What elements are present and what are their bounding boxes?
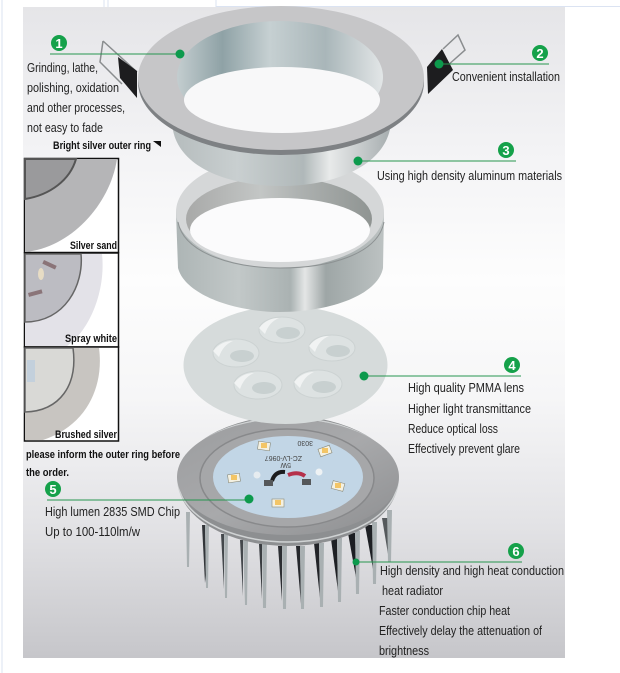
product: PMMA lens (184, 306, 388, 424)
callout 6: High density and high heat conduction (380, 563, 564, 578)
callout 4: Higher light transmittance (408, 401, 531, 416)
outer ring label: Bright silver outer ring (53, 140, 151, 152)
callout 3: Using high density aluminum materials (377, 168, 562, 183)
callout 1: Grinding, lathe, (27, 60, 98, 75)
LED circuit board (213, 436, 363, 518)
right clip (443, 35, 465, 66)
label: Silver sand (70, 240, 117, 252)
callout 5: Up to 100-110lm/w (45, 524, 141, 539)
inset: brushed silver (24, 347, 118, 441)
callout 2: Convenient installation (452, 69, 560, 84)
product: threaded ring (176, 156, 384, 312)
product: heat sink with LED board (177, 416, 399, 609)
callout 4: 4 (508, 358, 516, 373)
callout 1: and other processes, (27, 100, 125, 115)
callout 2: 2 (536, 46, 544, 61)
callout 3 (354, 142, 562, 183)
callout 6: heat radiator (382, 583, 444, 598)
inset: silver sand (24, 158, 118, 252)
callout 6: brightness (379, 643, 429, 658)
callout 6 (352, 543, 564, 658)
left clip (100, 41, 137, 84)
callout 6: Faster conduction chip heat (379, 603, 510, 618)
callout 3: 3 (502, 143, 510, 158)
rim (178, 416, 398, 546)
callout 6: 6 (512, 544, 520, 559)
callout 1: 1 (55, 36, 63, 51)
callout 4: Effectively prevent glare (408, 441, 520, 456)
product: outer ring housing (100, 6, 465, 186)
callout 2 (434, 45, 560, 84)
label: Brushed silver (55, 429, 118, 441)
label: Spray white (65, 333, 117, 345)
order note: please inform the outer ring before (26, 449, 180, 461)
fins (186, 510, 392, 609)
callout 1: not easy to fade (27, 120, 103, 135)
callout 4: High quality PMMA lens (408, 380, 524, 395)
callout 1: polishing, oxidation (27, 80, 119, 95)
product: heat sink with LED board: 5W (280, 461, 291, 468)
product: heat sink with LED board: 3030 (297, 439, 313, 446)
callout 5: High lumen 2835 SMD Chip (45, 504, 180, 519)
inset: spray white (24, 253, 118, 347)
order note (26, 449, 180, 479)
callout 1 (27, 35, 184, 135)
callout 4: Reduce optical loss (408, 421, 498, 436)
callout 5: 5 (49, 482, 57, 497)
callout 6: Effectively delay the attenuation of (379, 623, 542, 638)
order note: the order. (26, 467, 69, 479)
callout 5 (45, 481, 254, 539)
product: heat sink with LED board: ZC-LV-0967 (265, 454, 302, 461)
callout 4 (360, 357, 531, 456)
body (172, 122, 391, 186)
